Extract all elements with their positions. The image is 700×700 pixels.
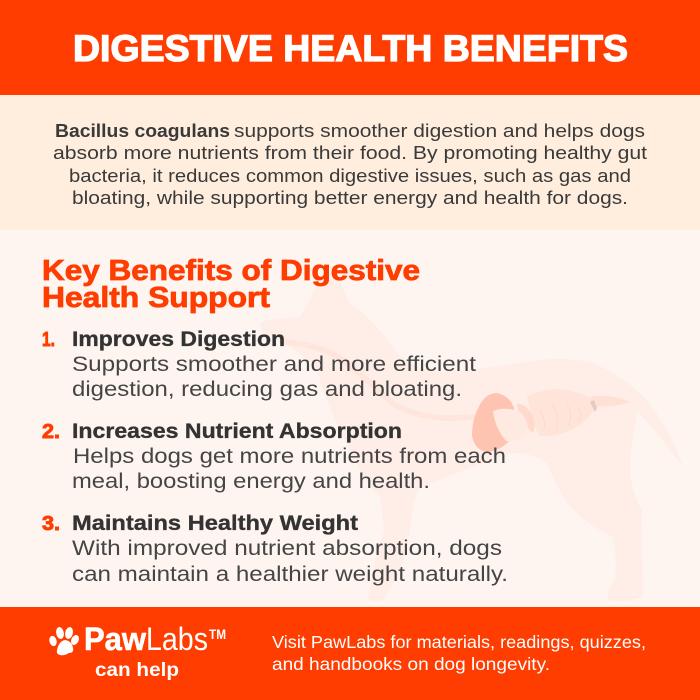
panel: header band — [0, 0, 700, 95]
intro paragraph: Bacillus coagulans — [55, 120, 230, 141]
benefit 2 — [42, 419, 506, 493]
intro paragraph: bacteria, it reduces common digestive issues, such as gas and — [69, 165, 631, 186]
intestines — [527, 389, 597, 436]
benefit 1: Supports smoother and more efficient — [72, 353, 476, 376]
logo wordmark: can help — [95, 659, 179, 681]
intro paragraph: bloating, while supporting better energy and health for dogs. — [72, 187, 628, 208]
rectum tip — [590, 400, 597, 412]
liver — [472, 393, 514, 452]
benefit 3 — [42, 511, 508, 586]
benefit 3: 3. — [42, 513, 60, 535]
benefit 2: Increases Nutrient Absorption — [72, 419, 402, 443]
logo wordmark: Paw — [84, 621, 146, 657]
icon: paw print — [48, 626, 80, 655]
benefit 1: Improves Digestion — [72, 327, 285, 351]
rectum — [590, 396, 630, 406]
heading: key benefits — [42, 255, 420, 314]
intro paragraph: absorb more nutrients from their food. By promoting healthy gut — [53, 142, 647, 163]
benefit 2: meal, boosting energy and health. — [72, 470, 430, 493]
panel: key benefits background — [0, 230, 700, 607]
esophagus — [285, 342, 495, 418]
benefit 2: 2. — [42, 421, 60, 443]
benefit 1 — [42, 327, 476, 401]
intro paragraph: supports smoother digestion and helps dogs — [234, 120, 645, 141]
stomach — [493, 409, 528, 441]
heading: key benefits: Key Benefits of Digestive — [42, 255, 420, 287]
pancreas — [517, 404, 534, 433]
title: DIGESTIVE HEALTH BENEFITS — [73, 28, 628, 69]
benefit 2: Helps dogs get more nutrients from each — [73, 445, 506, 468]
footer text: Visit PawLabs for materials, readings, quizzes, — [272, 632, 646, 652]
panel: introduction — [0, 95, 700, 230]
benefit 3: can maintain a healthier weight naturally. — [72, 563, 508, 586]
panel: footer — [0, 607, 700, 700]
illustration: dog silhouette with digestive tract — [260, 279, 683, 602]
benefit 3: With improved nutrient absorption, dogs — [72, 537, 502, 560]
logo wordmark: TM — [209, 626, 226, 642]
footer text — [272, 632, 646, 674]
intro paragraph — [53, 120, 647, 208]
logo wordmark: Labs — [146, 621, 208, 657]
logo wordmark — [84, 621, 226, 681]
benefit 1: digestion, reducing gas and bloating. — [72, 378, 462, 401]
dog body — [260, 279, 683, 602]
heading: key benefits: Health Support — [42, 282, 271, 314]
benefit 3: Maintains Healthy Weight — [72, 511, 358, 535]
footer text: and handbooks on dog longevity. — [272, 654, 550, 674]
benefit 1: 1. — [42, 329, 55, 351]
